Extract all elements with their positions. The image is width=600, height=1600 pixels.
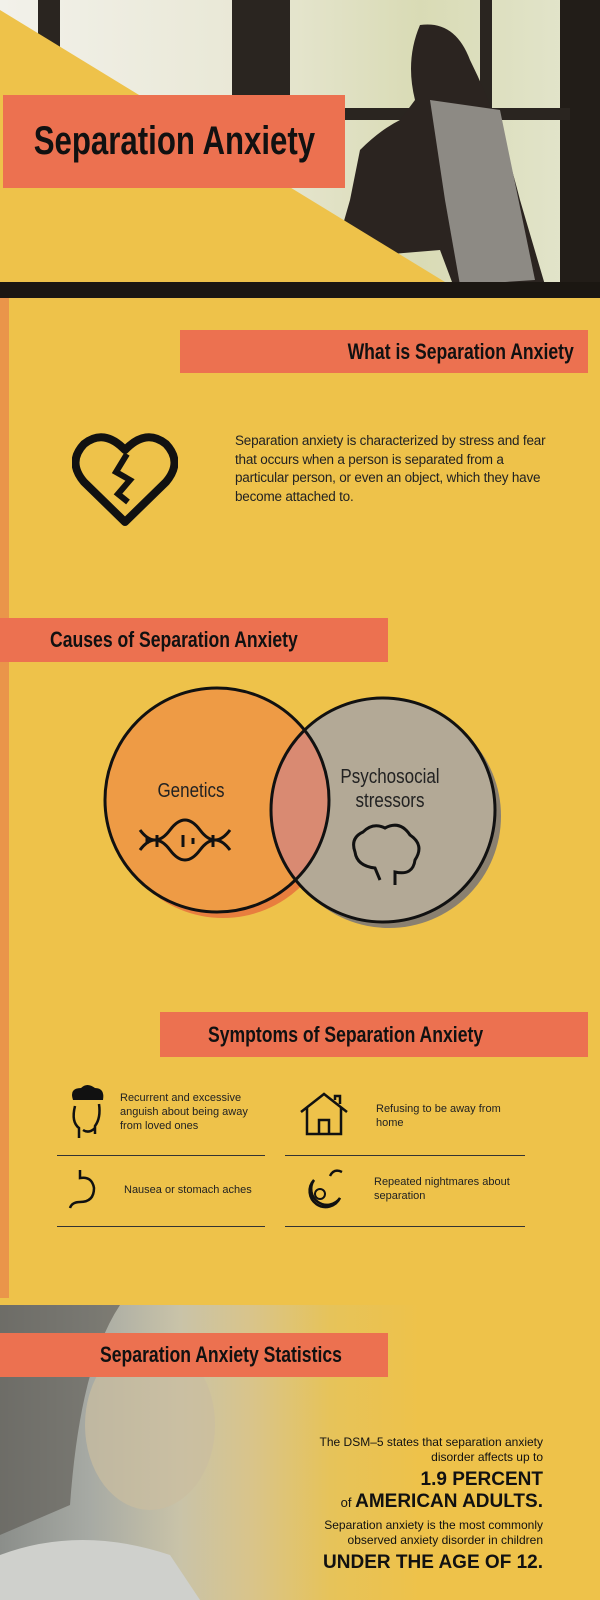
header photo <box>0 0 600 298</box>
text: definition: Separation anxiety is characterized by stress and fear that occurs when a person is separated from a particular person, or even an object, which they have become attached to. <box>235 433 545 504</box>
stat 1: disorder affects up to <box>431 1450 543 1464</box>
stat 2: UNDER THE AGE OF 12. <box>323 1552 543 1573</box>
title <box>3 95 345 188</box>
stats photo <box>0 1305 600 1600</box>
symptom: nightmares <box>308 1169 510 1208</box>
stat 2 <box>323 1518 543 1573</box>
stat 1: The DSM–5 states that separation anxiety <box>320 1435 543 1449</box>
psychosocial label: Psychosocial <box>340 765 440 787</box>
heading: statistics <box>0 1333 388 1377</box>
symptom: nightmares: Repeated nightmares about separation <box>374 1176 510 1202</box>
symptom: stomach <box>68 1170 252 1208</box>
heading: what is <box>180 330 588 373</box>
icon: brain <box>354 825 419 885</box>
stat 2: Separation anxiety is the most commonly <box>324 1518 543 1532</box>
symptom: anguish: Recurrent and excessive anguish about being away from loved ones <box>120 1092 248 1132</box>
venn diagram <box>104 686 501 928</box>
heading: statistics: Separation Anxiety Statistics <box>100 1342 342 1367</box>
stat 1: 1.9 PERCENT <box>421 1469 543 1490</box>
icon: broken heart <box>72 433 178 526</box>
symptom: anguish <box>72 1085 248 1138</box>
stat 1: of AMERICAN ADULTS. <box>341 1491 543 1512</box>
heading: symptoms <box>160 1012 588 1057</box>
stat 2: observed anxiety disorder in children <box>348 1533 543 1547</box>
heading: causes: Causes of Separation Anxiety <box>50 627 298 652</box>
symptom: home: Refusing to be away from home <box>376 1103 501 1129</box>
left grunge strip <box>0 298 9 1298</box>
icon: dna <box>140 820 230 860</box>
genetics label: Genetics <box>157 779 225 801</box>
symptom: stomach: Nausea or stomach aches <box>124 1184 252 1196</box>
stat 1 <box>320 1435 543 1512</box>
title: Separation Anxiety <box>33 119 315 163</box>
heading: causes <box>0 618 388 662</box>
heading: what is: What is Separation Anxiety <box>348 338 574 364</box>
heading: symptoms: Symptoms of Separation Anxiety <box>208 1022 483 1046</box>
symptom: home <box>300 1092 501 1136</box>
venn diagram: stressors <box>356 789 424 811</box>
